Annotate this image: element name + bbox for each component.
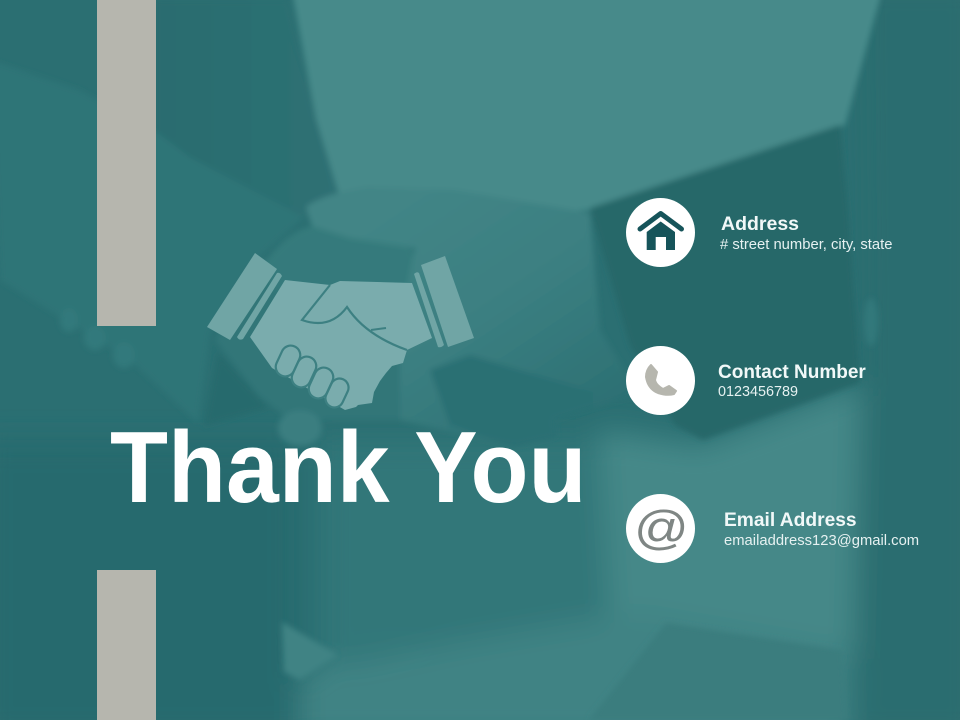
shirt and lower areas [600, 385, 860, 660]
email text: emailaddress123@gmail.com [724, 533, 919, 549]
icon: at sign [626, 494, 695, 563]
left hand dome [265, 226, 425, 290]
icon: at sign: @ [633, 502, 688, 554]
right jacket sleeve [590, 125, 860, 440]
address text: # street number, city, state [720, 237, 892, 253]
shirt upper [290, 0, 885, 225]
icon: handshake [207, 253, 474, 410]
contact item: address [626, 198, 892, 267]
under hand strip [215, 240, 420, 420]
lower finger tip [278, 410, 322, 446]
phone text: 0123456789 [718, 384, 798, 400]
right jacket button [864, 298, 878, 346]
icon: house [626, 198, 695, 267]
light thumb lower [282, 622, 338, 680]
decorative bar: bottom [97, 570, 156, 720]
address heading: Address [721, 213, 799, 235]
title: Thank You [110, 412, 587, 524]
contact item: email [626, 494, 919, 563]
laptop [589, 623, 847, 720]
phone heading: Contact Number [718, 362, 866, 383]
icon: phone [626, 346, 695, 415]
left jacket sleeve [0, 60, 304, 423]
decorative bar: top [97, 0, 156, 326]
sleeve buttons [60, 308, 135, 368]
dark upper panel [155, 0, 348, 225]
right hand [306, 187, 640, 447]
contact item: phone [626, 346, 866, 415]
email heading: Email Address [724, 510, 857, 531]
